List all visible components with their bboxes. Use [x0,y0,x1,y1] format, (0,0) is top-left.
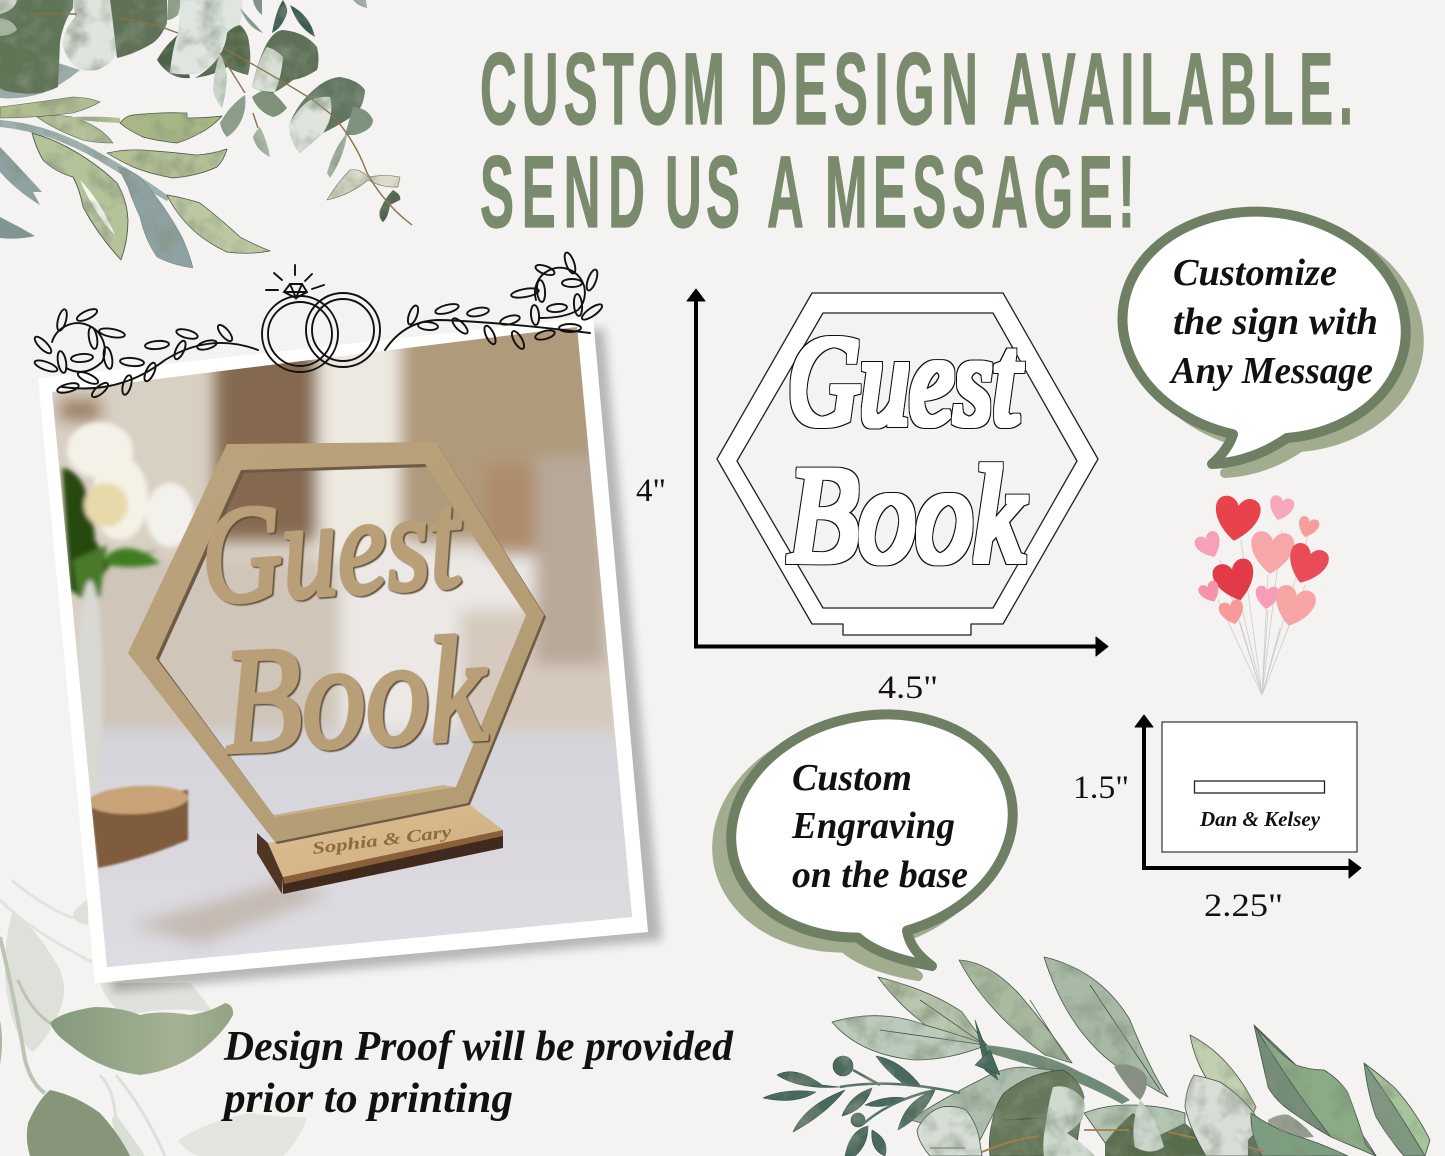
note: design proof: prior to printing [221,1076,513,1122]
heading: custom design available: DESIGN [750,33,978,147]
sign lettering: guest: Guest [196,462,467,633]
bubble text: the sign with [1173,301,1378,343]
heading: custom design available [480,33,1353,250]
slot [1194,781,1324,793]
outlined lettering: guest: Guest [788,310,1023,452]
dimension diagram: base [1073,715,1361,924]
dimension diagram: main sign [636,289,1108,706]
wood slice [87,783,189,868]
bubble text: on the base [792,854,968,896]
icon: heart balloons [1193,494,1331,695]
note: design proof: Design Proof will be provided [223,1024,734,1070]
wooden hexagon sign [128,442,546,894]
hexagon outline drawing [717,293,1098,635]
rings with diamond [262,265,380,372]
height label: 1.5" [1073,770,1129,806]
heading: custom design available: AVAILABLE. [1003,33,1353,147]
speech bubble: custom engraving [717,714,1013,976]
bubble text: Customize [1173,252,1337,294]
note: design proof [221,1024,734,1122]
left vine [32,307,258,399]
heading: custom design available: A [767,136,804,250]
outlined lettering: book: Book [788,438,1026,591]
sign lettering: book: Book [219,605,491,785]
foliage: bottom-left pale leaves [0,880,307,1156]
heading: custom design available: CUSTOM [480,33,725,147]
bubble text: Engraving [791,805,955,847]
foliage: top-left watercolor leaves [0,0,412,268]
bubble text: Custom [792,757,912,799]
speech bubble: customize the sign [1123,212,1419,473]
engraved base name: Sophia & Cary [311,822,453,858]
height label: 4" [636,473,666,509]
foliage: bottom-right watercolor leaves [763,957,1430,1156]
blurred room backdrop and table [40,320,650,980]
engraved name: Dan & Kelsey [1199,807,1321,831]
wedding rings and vine ornament [32,251,604,399]
axis arrows [687,289,1108,656]
white photo frame [38,317,648,983]
right vine [385,251,604,351]
base rectangle [1162,722,1357,852]
axis arrows [1135,715,1361,878]
width label: 4.5" [878,670,938,706]
heading: custom design available: MESSAGE! [825,136,1135,250]
bubble text [1169,252,1378,392]
bubble text: Any Message [1169,350,1373,392]
heading: custom design available: SEND [480,136,645,250]
width label: 2.25" [1204,888,1283,924]
bubble text [791,757,968,896]
panel: product photo [38,317,662,992]
heading: custom design available: US [665,136,740,250]
